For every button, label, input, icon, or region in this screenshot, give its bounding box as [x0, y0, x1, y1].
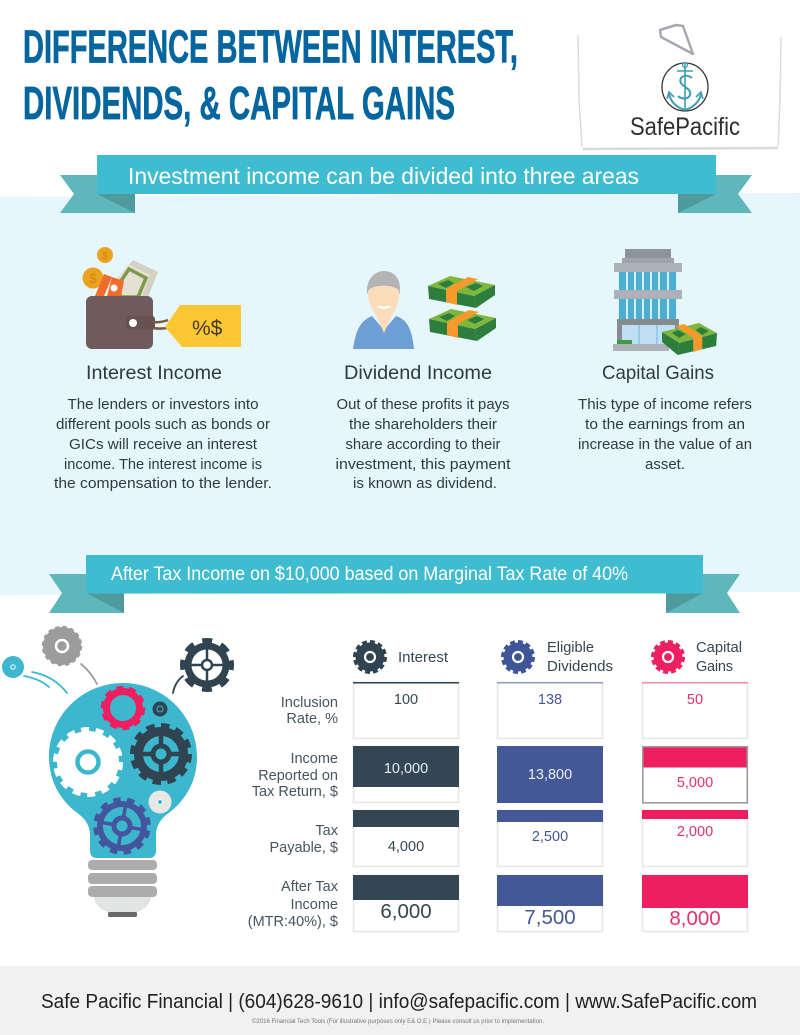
table column: eligible dividends: 13,800: [528, 767, 572, 783]
bills: [113, 260, 158, 297]
banner: three areas: Investment income can be divided into three areas: [128, 163, 639, 189]
connector lines: [24, 664, 183, 693]
outer dark gear: [182, 640, 232, 690]
pink gear: [103, 688, 143, 728]
teal gear: [2, 656, 24, 678]
panel: capital gains text: Capital Gains: [602, 362, 714, 384]
table column header: capital gains: [652, 640, 742, 675]
panel: capital gains text: This type of income refers: [578, 397, 752, 413]
logo wordmark: SafePacific: [630, 113, 740, 141]
table column header: interest: Interest: [398, 650, 448, 666]
panel: interest income text: income. The interest income is: [64, 457, 262, 473]
table column: eligible dividends: 2,500: [532, 829, 568, 845]
row labels: After Tax: [281, 879, 339, 895]
cash bundle: [662, 323, 717, 355]
row labels: Reported on: [258, 768, 338, 784]
row labels: Inclusion: [281, 695, 338, 711]
table column: capital gains: 2,000: [677, 824, 713, 840]
table column: capital gains: [642, 682, 748, 932]
white gear: [56, 730, 120, 794]
icon: wallet with money and tag: %$: [192, 317, 223, 340]
illustration: light bulb with gears: [2, 628, 232, 917]
table column header: capital gains: Gains: [696, 659, 733, 675]
table column header: capital gains: Capital: [696, 640, 742, 656]
table column header: eligible dividends: Eligible: [547, 640, 594, 656]
bulb glass: [49, 683, 197, 858]
banner: after tax income: After Tax Income on $10,000 based on Marginal Tax Rate of 40%: [111, 564, 628, 585]
icon: office building with cash: [613, 249, 717, 355]
dark gear: [132, 726, 190, 782]
blue gear: [91, 795, 153, 857]
panel: dividend income text: Dividend Income: [344, 362, 492, 384]
logo card: [578, 25, 781, 149]
row labels: Income: [290, 751, 338, 767]
row labels: Income: [290, 897, 338, 913]
icon: wallet with money and tag: $: [102, 251, 108, 262]
panel: interest income text: Interest Income: [86, 362, 222, 384]
panel: interest income text: The lenders or investors into: [68, 397, 258, 413]
table column header: eligible dividends: [502, 640, 613, 675]
banner: three areas: [60, 155, 752, 213]
table column: capital gains: 50: [687, 692, 703, 708]
icon: wallet with money and tag: $: [89, 271, 97, 286]
table column: interest: [353, 682, 459, 932]
grey gear: [44, 628, 80, 664]
title: DIFFERENCE BETWEEN INTEREST,: [23, 20, 518, 72]
banner: after tax income: [49, 555, 740, 613]
panel: dividend income text: investment, this payment: [336, 457, 510, 473]
table column: interest: 100: [394, 692, 418, 708]
title: DIVIDENDS, & CAPITAL GAINS: [23, 77, 455, 129]
panel: dividend income text: is known as dividend.: [353, 476, 497, 492]
panel: capital gains text: to the earnings from an: [585, 417, 745, 433]
panel: capital gains text: [578, 362, 752, 473]
pale blue background panel: [0, 193, 800, 595]
footer: Safe Pacific Financial | (604)628-9610 | info@safepacific.com | www.SafePacific.com: [41, 991, 757, 1013]
icon: man with cash: [353, 271, 496, 349]
panel: dividend income text: Out of these profits it pays: [336, 397, 510, 413]
row labels: (MTR:40%), $: [248, 914, 338, 930]
table column: eligible dividends: 138: [538, 692, 562, 708]
table column: eligible dividends: 7,500: [524, 906, 576, 929]
table column: interest: 10,000: [384, 761, 428, 777]
bulb base: [94, 897, 151, 912]
row labels: Tax: [315, 823, 339, 839]
footer: ©2016 Financial Tech Tools (For illustrative purposes only E& O.E.) Please consult us prior to implementation.: [252, 1017, 544, 1025]
panel: dividend income text: the shareholders their: [349, 417, 497, 433]
cash bundle bottom: [429, 309, 496, 341]
icon: wallet with money and tag: [82, 247, 241, 349]
row labels: Tax Return, $: [252, 784, 338, 800]
title: [23, 20, 518, 129]
table column: capital gains: 8,000: [669, 907, 721, 930]
table column header: interest: [354, 642, 448, 672]
panel: dividend income text: [336, 362, 510, 492]
panel: interest income text: different pools such as bonds or: [56, 417, 270, 433]
table column header: eligible dividends: Dividends: [547, 659, 613, 675]
panel: dividend income text: share according to their: [346, 437, 501, 453]
row labels: Payable, $: [269, 840, 338, 856]
panel: interest income text: [54, 362, 272, 492]
panel: capital gains text: increase in the value of an: [578, 437, 752, 453]
panel: interest income text: the compensation to the lender.: [54, 476, 272, 492]
table column: capital gains: 5,000: [677, 775, 713, 791]
row labels: [248, 695, 339, 930]
price tag: [165, 305, 241, 347]
panel: interest income text: GICs will receive an interest: [69, 437, 257, 453]
footer: [0, 966, 800, 1035]
cash bundle top: [428, 276, 495, 308]
pale gear: [148, 790, 172, 814]
table column: interest: 4,000: [388, 839, 424, 855]
row labels: Rate, %: [286, 711, 338, 727]
icon: anchor logo: [662, 62, 708, 111]
panel: capital gains text: asset.: [645, 457, 685, 473]
small dark gear: [152, 702, 168, 716]
icon: paper clip: [660, 25, 693, 54]
table column: eligible dividends: [497, 682, 603, 932]
table column: interest: 6,000: [380, 900, 432, 923]
